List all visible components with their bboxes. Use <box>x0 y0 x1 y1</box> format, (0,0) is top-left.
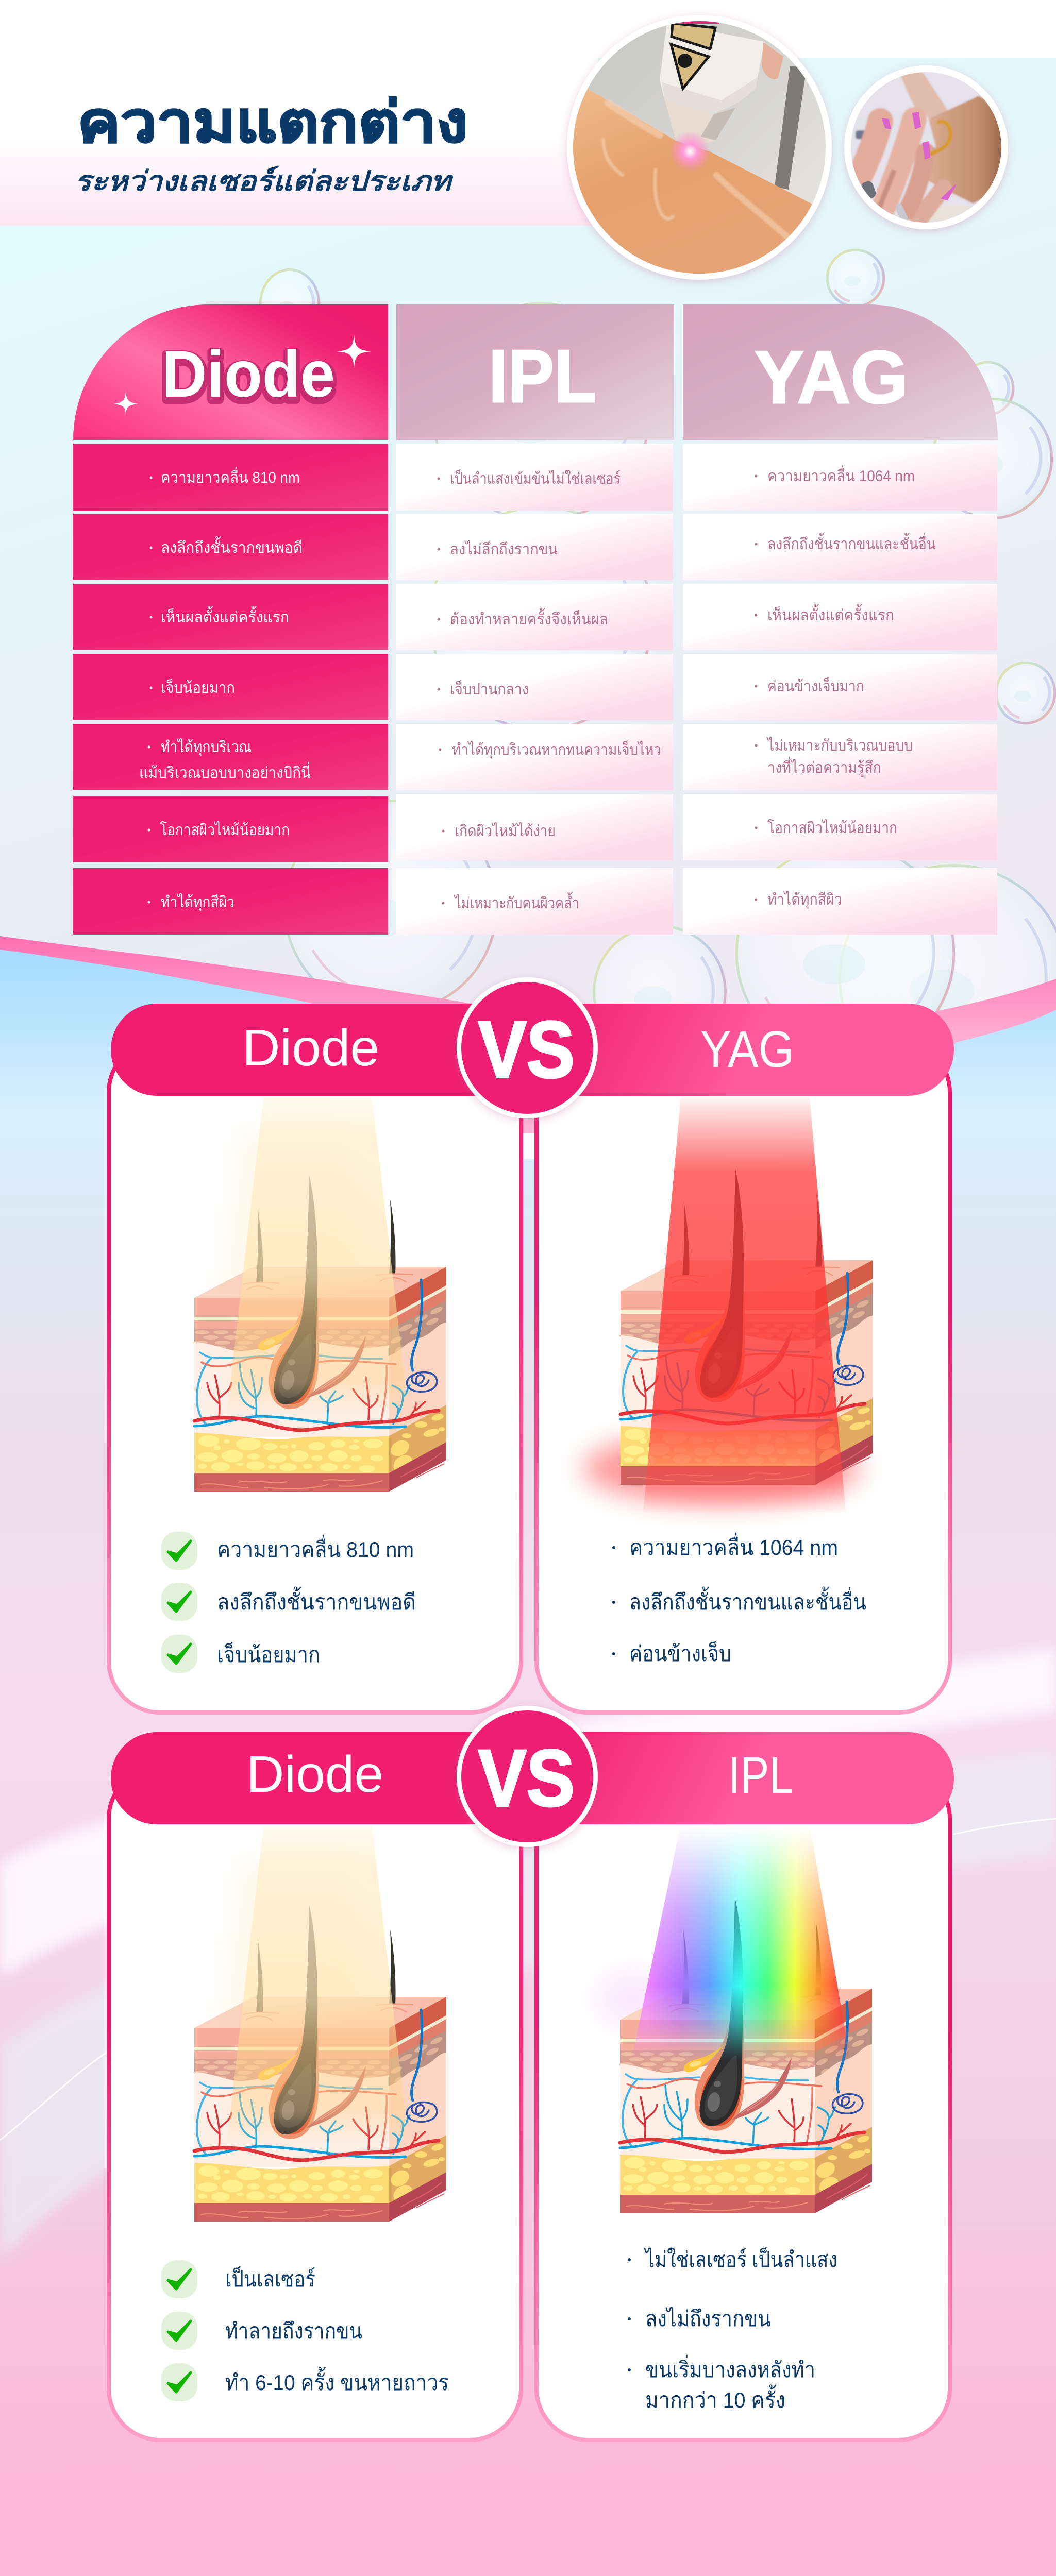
panel: Diode vs YAG <box>109 977 954 1713</box>
badge: VS: VS <box>478 1734 575 1823</box>
photo: laser on arm <box>567 15 845 289</box>
column: Diode cells: ความยาวคลื่น 810 nm <box>161 467 300 486</box>
column: YAG cells: ค่อนข้างเจ็บมาก <box>767 676 864 695</box>
card: Diode <box>109 1767 521 2440</box>
column header: Diode <box>73 304 388 440</box>
list: YAG characteristics: ความยาวคลื่น 1064 nm <box>629 1533 838 1560</box>
column: Diode cells: โอกาสผิวไหม้น้อยมาก <box>160 821 290 839</box>
column: IPL cells <box>396 444 673 935</box>
column: Diode cells: แม้บริเวณบอบบางอย่างบิกินี่ <box>139 762 311 782</box>
column: YAG cells: ลงลึกถึงชั้นรากขนและชั้นอื่น <box>767 533 936 553</box>
column: IPL cells: ไม่เหมาะกับคนผิวคล้ำ <box>454 892 579 912</box>
header pill: Diode / YAG: Diode <box>242 1019 379 1077</box>
card: Diode <box>109 1041 521 1713</box>
column: IPL cells: เจ็บปานกลาง <box>450 680 529 698</box>
column: YAG cells: โอกาสผิวไหม้น้อยมาก <box>767 819 897 837</box>
list: IPL characteristics: ลงไม่ถึงรากขน <box>645 2307 771 2331</box>
list: IPL characteristics <box>628 2247 837 2412</box>
photo: handheld device <box>844 65 1010 232</box>
badge: VS <box>457 1706 598 1847</box>
list: Diode benefits: ความยาวคลื่น 810 nm <box>217 1535 414 1562</box>
list: YAG characteristics: ลงลึกถึงชั้นรากขนและชั้นอื่น <box>629 1586 866 1614</box>
card: IPL <box>537 1767 950 2440</box>
list: IPL characteristics: มากกว่า 10 ครั้ง <box>645 2384 785 2412</box>
beam: IPL rainbow light <box>598 1824 872 2213</box>
column: Diode cells: เห็นผลตั้งแต่ครั้งแรก <box>161 606 289 626</box>
column: Diode cells: ทำได้ทุกสีผิว <box>161 893 234 912</box>
list: Diode benefits: ลงลึกถึงชั้นรากขนพอดี <box>217 1586 416 1614</box>
column: YAG cells: ความยาวคลื่น 1064 nm <box>767 465 915 485</box>
column: Diode cells <box>73 444 388 935</box>
list: YAG characteristics <box>612 1533 866 1666</box>
header pink band <box>0 0 598 226</box>
list: Diode benefits: ทำลายถึงรากขน <box>225 2319 362 2343</box>
column header: IPL: IPL <box>489 334 596 418</box>
comparison table <box>73 304 998 935</box>
column: Diode cells: ทำได้ทุกบริเวณ <box>161 738 252 757</box>
column header: Diode: Diode <box>162 341 335 414</box>
list: YAG characteristics: ค่อนข้างเจ็บ <box>629 1641 731 1666</box>
column: YAG cells: ทำได้ทุกสีผิว <box>767 890 842 909</box>
column: IPL cells: เป็นลำแสงเข้มข้นไม่ใช่เลเซอร์ <box>450 469 621 487</box>
title: ความแตกต่าง <box>77 91 468 154</box>
header pill: Diode / YAG <box>111 1004 954 1096</box>
lower background with light streaks <box>0 950 1056 2576</box>
column: IPL cells: ทำได้ทุกบริเวณหากทนความเจ็บไหว <box>452 740 661 759</box>
header pill: Diode / IPL <box>111 1732 954 1824</box>
badge: VS: VS <box>478 1005 575 1095</box>
list: Diode benefits: เป็นเลเซอร์ <box>225 2266 315 2291</box>
pink wave <box>0 936 1056 1133</box>
header pill: Diode / IPL: Diode <box>246 1745 383 1803</box>
column: YAG cells: างที่ไวต่อความรู้สึก <box>767 757 881 777</box>
list: Diode benefits: ทำ 6-10 ครั้ง ขนหายถาวร <box>225 2367 449 2395</box>
column header: YAG: YAG <box>755 335 908 419</box>
column: Diode cells: เจ็บน้อยมาก <box>161 678 235 697</box>
card: YAG <box>537 1041 950 1713</box>
column header: Diode: Diode <box>162 337 335 411</box>
column: IPL cells: ต้องทำหลายครั้งจึงเห็นผล <box>450 608 608 628</box>
background: upper bubble area <box>0 0 1056 1095</box>
list: Diode benefits <box>161 2260 449 2401</box>
column: YAG cells: เห็นผลตั้งแต่ครั้งแรก <box>767 604 894 624</box>
panel: Diode vs IPL <box>109 1706 954 2440</box>
column: Diode cells: ลงลึกถึงชั้นรากขนพอดี <box>161 536 303 556</box>
column: YAG cells <box>683 444 997 935</box>
subtitle: ระหว่างเลเซอร์แต่ละประเภท <box>75 165 454 197</box>
beam: diode light <box>193 1826 446 2222</box>
list: IPL characteristics: ไม่ใช่เลเซอร์ เป็นลำแสง <box>644 2247 837 2272</box>
header pill: Diode / IPL: IPL <box>728 1747 793 1804</box>
column header: IPL <box>396 304 674 440</box>
beam: diode light <box>193 1097 446 1492</box>
badge: VS <box>457 977 598 1118</box>
column header: YAG <box>683 304 998 440</box>
list: Diode benefits: เจ็บน้อยมาก <box>217 1642 320 1667</box>
column: YAG cells: ไม่เหมาะกับบริเวณบอบบ <box>766 736 913 754</box>
list: IPL characteristics: ขนเริ่มบางลงหลังทำ <box>645 2355 815 2382</box>
header pill: Diode / YAG: YAG <box>700 1021 794 1078</box>
column: IPL cells: เกิดผิวไหม้ได้ง่าย <box>455 822 556 840</box>
beam: YAG red light <box>582 1097 873 1512</box>
list: Diode benefits <box>161 1532 416 1673</box>
column: IPL cells: ลงไม่ลึกถึงรากขน <box>450 540 558 558</box>
